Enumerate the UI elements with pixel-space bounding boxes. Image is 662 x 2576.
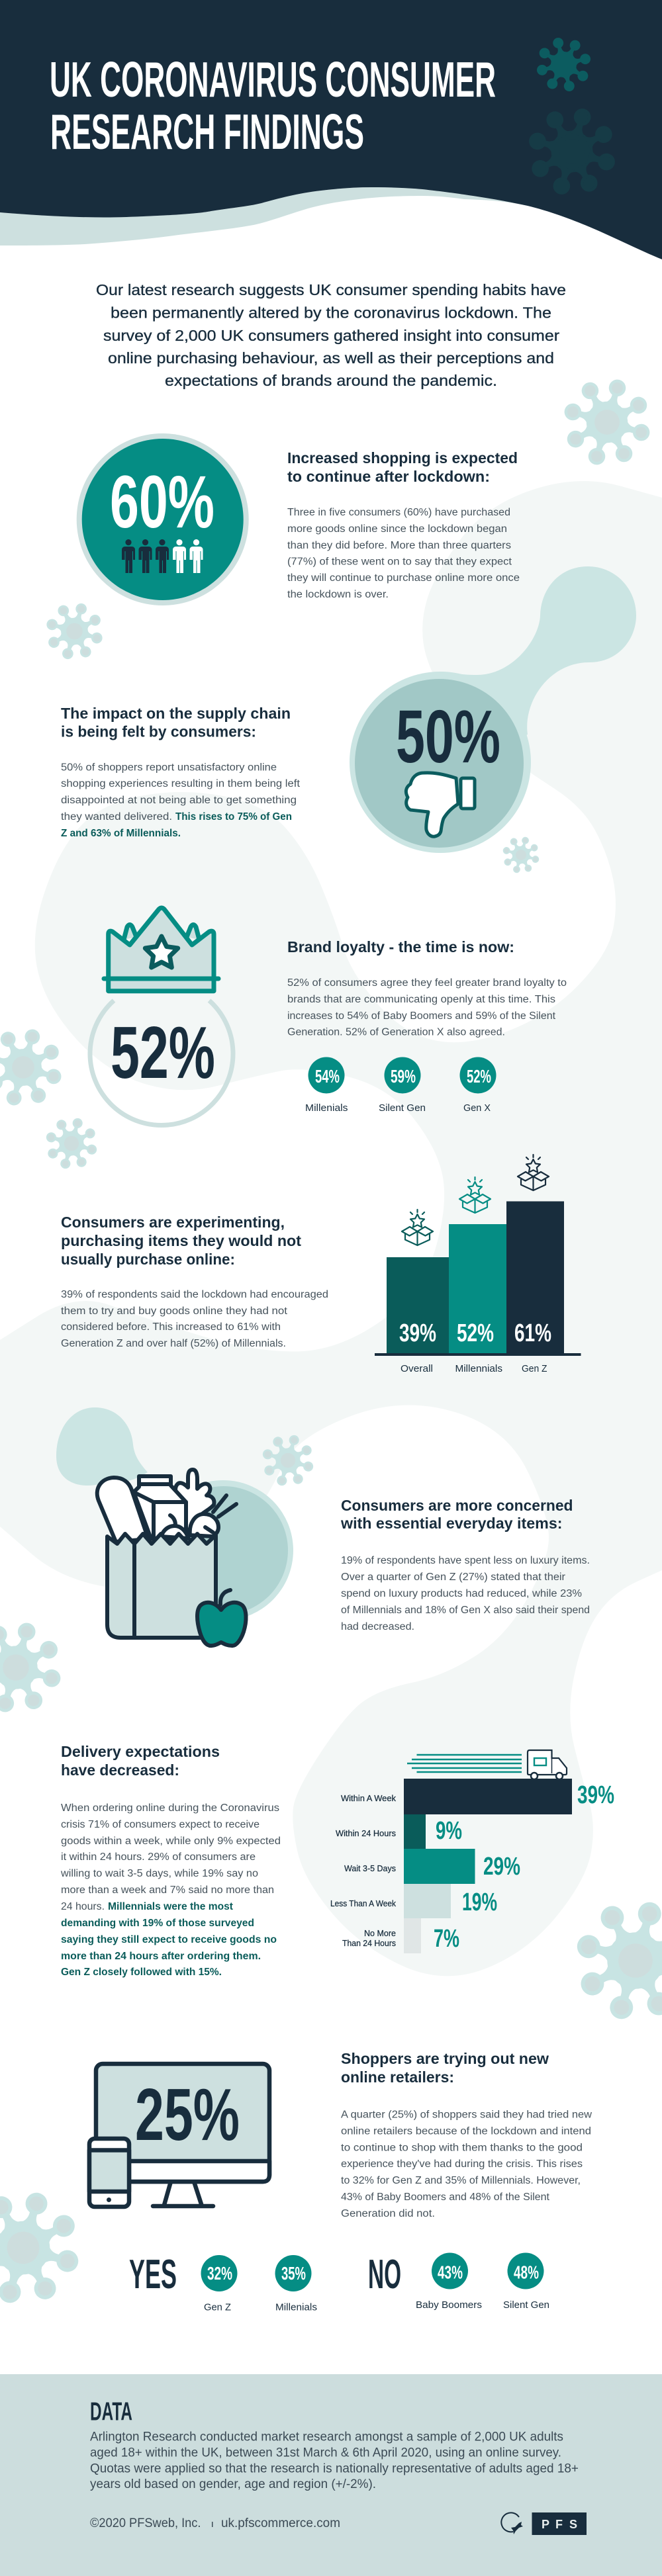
carrot stems [213,1495,236,1517]
logo: PFS: P [542,2518,549,2531]
heading: purchasing items they would not [61,1232,301,1249]
bar chart: delivery [330,1779,614,1953]
bar chart: Gen Z [522,1364,547,1374]
data text: years old based on gender, age and region (+/-2%). [90,2477,376,2491]
heading: Shoppers are trying out new [341,2050,549,2067]
data text [90,2430,579,2491]
heading: Brand loyalty - the time is now: [287,938,514,955]
body text: Generation did not. [341,2208,435,2219]
body text: A quarter (25%) of shoppers said they had tried new [341,2110,592,2120]
intro text [96,281,566,389]
bar chart: delivery: 7% [434,1925,459,1953]
body text: Millennials were the most [108,1901,233,1912]
body text: of Millennials and 18% of Gen X also said their spend [341,1605,590,1616]
panel: data footer [0,2374,662,2576]
body text: they will continue to purchase online more once [287,572,520,584]
apple stem [220,1590,230,1605]
body text: Three in five consumers (60%) have purchased [287,507,510,518]
intro text: survey of 2,000 UK consumers gathered insight into consumer [103,327,559,344]
stat: Millenials 35% [275,2255,317,2313]
label: NO: NO [368,2252,401,2297]
stat: Silent Gen 59%: Silent Gen [379,1103,426,1114]
stat: Millenials 35%: Millenials [275,2303,317,2313]
body text: crisis 71% of consumers expect to receive [61,1819,260,1830]
copyright: uk.pfscommerce.com [221,2516,340,2530]
ring arc [90,1000,233,1125]
heading [340,1497,573,1532]
body text: experience they've had during the crisis. This rises [341,2158,583,2170]
turnip [190,1514,218,1536]
logo: PFS [501,2512,587,2535]
teal blob behind bag [56,1407,148,1486]
icon: five people, three dark [122,539,203,573]
icon: crown [104,908,218,991]
stat: Millenials 54% [305,1057,348,1114]
body text: to continue to shop with them thanks to the good [341,2143,583,2153]
body text: 19% of respondents have spent less on luxury items. [341,1555,590,1566]
heading: Consumers are experimenting, [61,1214,285,1231]
body text: brands that are communicating openly at this time. This [287,994,555,1005]
body text: to 32% for Gen Z and 35% of Millennials. However, [341,2175,581,2186]
bar chart: delivery: Than 24 Hours [342,1938,396,1948]
body text [341,1555,590,1632]
bar chart: delivery: No More [364,1928,396,1938]
heading: The impact on the supply chain [61,705,291,722]
data text: aged 18+ within the UK, between 31st March & 6th April 2020, using an online survey. [90,2446,561,2460]
body text: demanding with 19% of those surveyed [61,1918,254,1929]
body text: 52% of consumers agree they feel greater brand loyalty to [287,977,567,989]
data text: Quotas were applied so that the research is nationally representative of adults aged 18+ [90,2462,579,2476]
copyright [90,2516,340,2530]
panel: new retailers [89,2050,592,2313]
heading: Consumers are more concerned [341,1497,573,1514]
bar chart: delivery: 9% [436,1817,462,1845]
body text: 24 hours. [61,1901,105,1912]
body text [287,507,520,600]
body text [287,977,567,1038]
leafy greens [175,1470,214,1535]
stat: Gen X 52% [459,1057,496,1114]
logo: PFS: F [555,2518,563,2531]
stat: Gen X 52%: 52% [467,1066,491,1087]
wave band [0,187,528,245]
stat: Silent Gen 48%: 48% [514,2262,539,2283]
heading: have decreased: [61,1761,179,1779]
body text: 43% of Baby Boomers and 48% of the Silent [341,2192,550,2203]
heading [341,2050,549,2086]
big number: 25% [135,2074,240,2156]
stat: Gen X 52%: Gen X [463,1103,491,1114]
stat: Silent Gen 48%: Silent Gen [503,2300,549,2311]
body text: shopping experiences resulting in them being left [61,778,301,789]
badge: 60% circle: 60% [110,461,214,543]
stat: Gen Z 32%: Gen Z [204,2303,231,2313]
bar chart: delivery: 39% [577,1781,614,1809]
heading: DATA: DATA [90,2398,132,2426]
body text [60,1802,281,1978]
data text: Arlington Research conducted market research amongst a sample of 2,000 UK adults [90,2430,563,2444]
icon: virus near groceries [261,1434,314,1487]
heading: online retailers: [341,2068,454,2086]
heading: with essential everyday items: [340,1515,563,1532]
stat: Gen Z 32% [201,2255,237,2313]
icon: virus near 50% [502,836,540,874]
body text: 39% of respondents said the lockdown had encouraged [61,1289,328,1300]
stat: Silent Gen 59% [379,1057,426,1114]
body text [341,2110,592,2219]
bar chart: delivery: Wait 3-5 Days [344,1863,396,1873]
body text: goods within a week, while only 9% expected [61,1836,281,1847]
icon: virus right of delivery [574,1899,662,2022]
milk carton [134,1476,186,1538]
body text: it within 24 hours. 29% of consumers are [61,1851,256,1863]
body text: (77%) of these went on to say that they expect [287,556,512,568]
copyright: ©2020 PFSweb, Inc. [90,2516,201,2530]
stat: Silent Gen 48% [503,2252,549,2311]
heading: Delivery expectations [61,1743,220,1760]
body text: them to try and buy goods online they had not [61,1306,288,1317]
label: YES: YES [129,2252,177,2297]
body text: the lockdown is over. [287,589,389,600]
body text [61,1289,328,1349]
background: pale wavy shape [0,481,662,1976]
heading [61,1214,301,1268]
heading [61,1743,220,1779]
body text: online retailers because of the lockdown and intend [341,2125,591,2137]
paper bag [107,1534,216,1638]
panel: essential items [56,1407,590,1646]
icon: virus bottom left of groceries [0,1621,63,1714]
heading [61,705,291,740]
body text: When ordering online during the Coronavirus [61,1802,279,1814]
icon: grocery bag [97,1470,246,1646]
logo: PFS: S [569,2518,577,2531]
title [50,52,496,159]
intro text: been permanently altered by the coronavirus lockdown. The [111,304,551,322]
heading: is being felt by consumers: [61,723,256,740]
intro text: expectations of brands around the pandemic. [165,372,497,389]
panel: 60 percent [77,433,520,605]
small apple [161,1526,189,1538]
panel: 52 percent brand loyalty [90,908,567,1125]
body text: more than a week and 7% said no more than [61,1885,274,1896]
icon: virus left of 52% [0,1027,64,1108]
intro text: online purchasing behaviour, as well as their perceptions and [108,349,554,367]
body text: Gen Z closely followed with 15%. [61,1967,222,1978]
body text: had decreased. [341,1621,414,1632]
body text: spend on luxury products had reduced, while 23% [341,1588,582,1599]
icon: virus large [526,106,618,197]
bar chart: delivery: 19% [462,1888,497,1916]
body text: This rises to 75% of Gen [175,811,292,822]
stat: Millenials 54%: Millenials [305,1103,348,1114]
stat: Millenials 54%: 54% [315,1066,340,1087]
body text: 50% of shoppers report unsatisfactory online [61,762,277,773]
heading: usually purchase online: [61,1251,235,1268]
body text: more than 24 hours after ordering them. [61,1951,261,1962]
bar chart: Overall [401,1364,433,1374]
bar chart: 39% [399,1319,436,1347]
body text: more goods online since the lockdown began [287,523,507,535]
bar chart [375,1155,581,1374]
stat: Millenials 35%: 35% [281,2263,306,2284]
body text: Generation. 52% of Generation X also agreed. [287,1027,505,1038]
bread [97,1478,148,1542]
bar chart: 52% [457,1319,494,1347]
panel: 50 percent [61,566,636,853]
body text: increases to 54% of Baby Boomers and 59% of the Silent [287,1010,556,1022]
bar chart: Millennials [455,1364,502,1374]
body text [61,762,301,839]
bar chart: delivery: Within 24 Hours [336,1828,396,1838]
body text: saying they still expect to receive goods no [61,1934,277,1945]
circle behind bag [153,1480,293,1621]
badge: 50% circle [350,672,531,853]
body text: Over a quarter of Gen Z (27%) stated that their [341,1572,565,1583]
body text: willing to wait 3-5 days, while 19% say no [60,1868,258,1879]
icon: thumbs down [406,773,475,836]
bar chart: delivery: Less Than A Week [330,1898,396,1908]
intro text: Our latest research suggests UK consumer spending habits have [96,281,566,298]
bar chart: delivery: Within A Week [341,1793,396,1803]
teal blob behind circle [439,566,636,764]
badge: 60% circle [77,433,249,605]
badge: 50% circle: 50% [396,695,500,778]
icon: delivery truck with speed lines [407,1750,567,1779]
apple [197,1603,246,1646]
big number: 52% [111,1012,215,1094]
stat: Baby Boomers 43%: Baby Boomers [416,2300,482,2311]
stat: Gen Z 32%: 32% [207,2263,232,2284]
heading: Increased shopping is expected [287,449,518,466]
panel: experimenting [61,1155,581,1374]
icon: virus intro right [562,377,652,467]
bar chart: 61% [514,1319,551,1347]
body text: Generation Z and over half (52%) of Millennials. [61,1338,286,1349]
body text: considered before. This increased to 61% with [61,1321,281,1333]
header banner [0,0,662,259]
bar chart: delivery: 29% [483,1853,520,1881]
body text: than they did before. More than three quarters [287,540,511,551]
stat: Baby Boomers 43%: 43% [438,2262,463,2283]
stat: Silent Gen 59%: 59% [391,1066,416,1087]
heading: to continue after lockdown: [287,468,490,485]
body text: they wanted delivered. [61,811,172,822]
icon: monitor and phone [89,2064,269,2207]
dark header shape [0,0,662,259]
body text: Z and 63% of Millennials. [61,828,181,839]
icon: virus below 60% [45,602,104,660]
panel: delivery expectations [60,1743,614,1978]
icon: virus left of yes [0,2190,81,2306]
heading [287,449,518,485]
icon: virus small [530,30,598,99]
body text: disappointed at not being able to get something [61,795,297,806]
icon: virus under 52% [45,1117,98,1170]
stat: Baby Boomers 43% [416,2252,482,2311]
title: RESEARCH FINDINGS [50,104,364,159]
